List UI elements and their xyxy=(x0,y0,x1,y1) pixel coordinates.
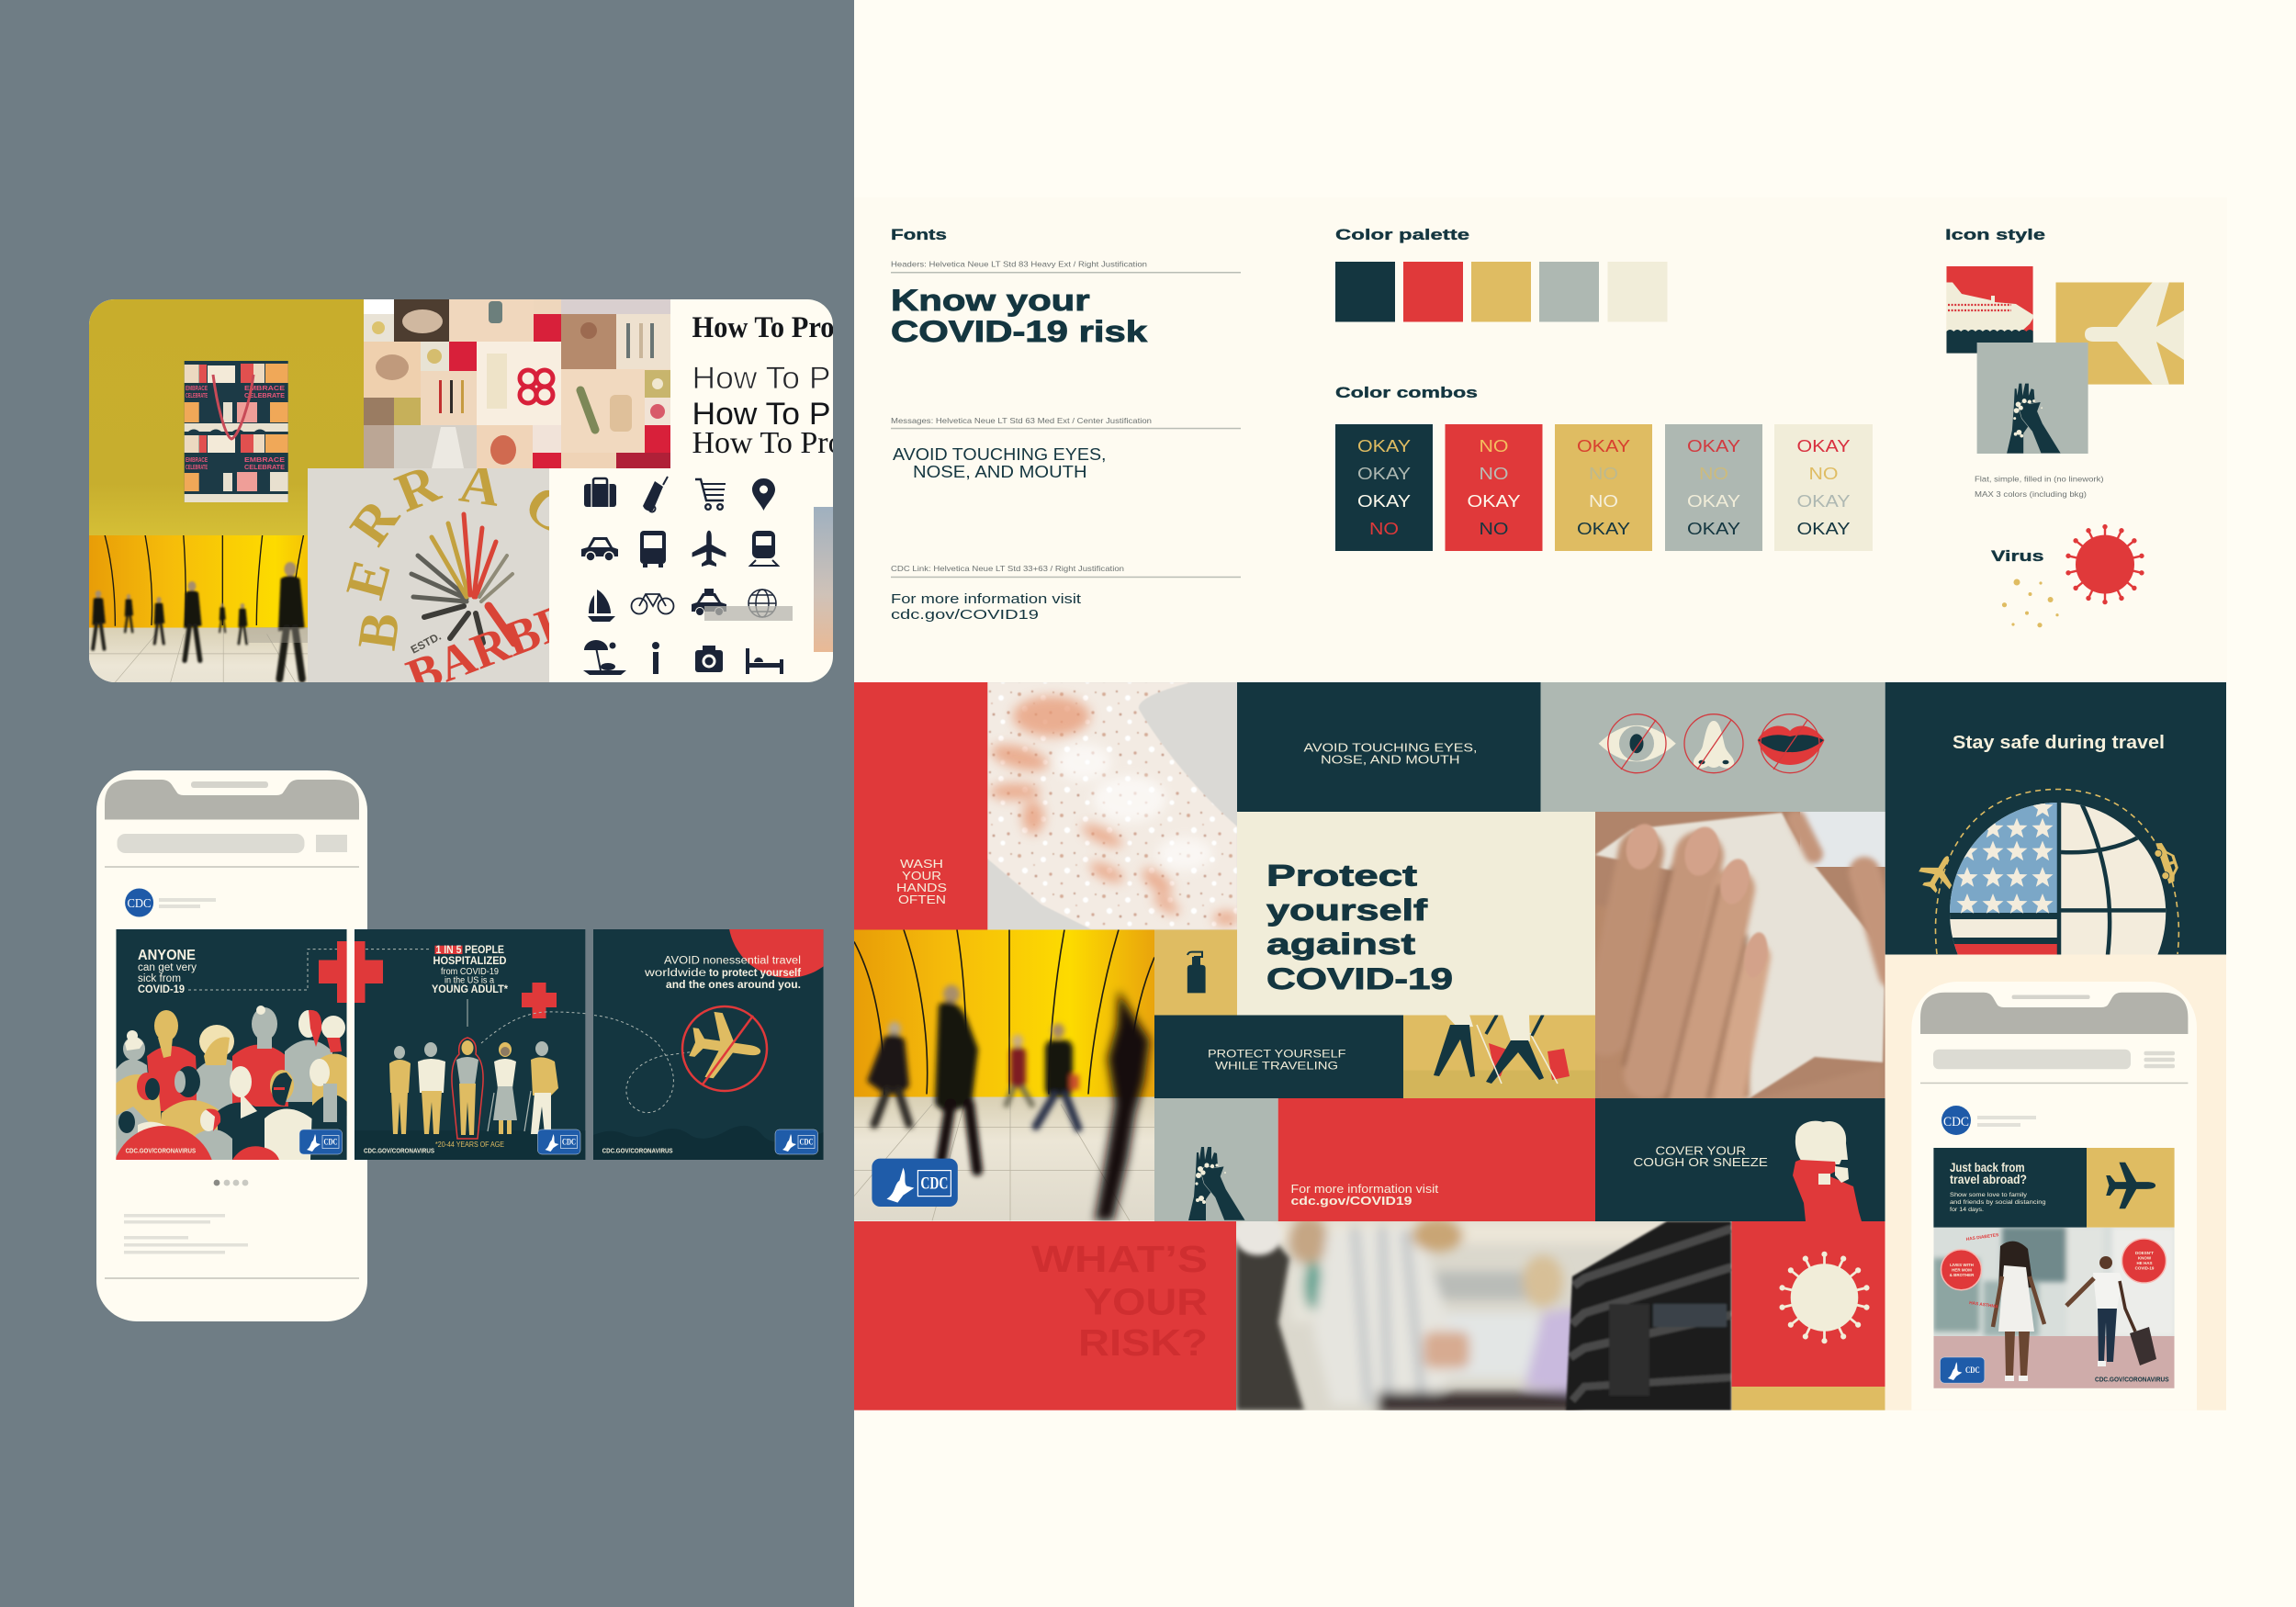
heading text: 1 IN 5 xyxy=(435,945,462,956)
section: fonts: cdc.gov/COVID19 xyxy=(891,607,1039,623)
icon: cruise ship xyxy=(1946,266,2033,354)
ad header: just back from travel abroad: Show some love to family xyxy=(1950,1192,2028,1198)
tile: protect yourself while traveling xyxy=(1154,1016,1403,1098)
callout: doesn't know he has covid: DOESN’T xyxy=(2135,1251,2154,1255)
ad photo: couple at airport: HAS ASTHMA xyxy=(1969,1300,1999,1309)
ad header: just back from travel abroad: travel abroad? xyxy=(1950,1173,2027,1186)
tile: what's your risk: RISK? xyxy=(1078,1321,1208,1364)
message text: and the ones around you. xyxy=(666,980,801,991)
social card 1: anyone can get sick xyxy=(116,929,347,1160)
icon: airplane xyxy=(2055,282,2184,385)
social card 2: 1 in 5 hospitalized xyxy=(355,929,586,1160)
callout: doesn't know he has covid: HE HAS xyxy=(2136,1261,2153,1265)
section: icon style: Flat, simple, filled in (no linework) xyxy=(1975,476,2104,483)
tile: wash your hands: WASH xyxy=(900,858,943,871)
photo: Berrac barber emblem: E xyxy=(334,554,402,605)
photo: tissue over face xyxy=(1595,812,1894,1111)
photo: yellow studio backdrop with shopping bag: EMBRACE xyxy=(244,457,285,464)
type specimens: How To Pro xyxy=(692,426,844,460)
illustration: person coughing into elbow xyxy=(1793,1121,1862,1221)
section: virus icon: Virus xyxy=(1991,548,2044,565)
type specimens: How To P xyxy=(692,361,830,396)
heading text: can get very xyxy=(138,962,197,973)
section: fonts: Fonts xyxy=(891,227,947,243)
section: colour combos: OKAY xyxy=(1357,465,1411,483)
ad photo: couple at airport xyxy=(1933,1227,2175,1388)
section: colour combos: OKAY xyxy=(1468,492,1521,511)
callout: doesn't know he has covid: COVID-19 xyxy=(2135,1265,2155,1271)
section: colour combos: NO xyxy=(1699,465,1728,483)
illustration: five figures xyxy=(389,1038,558,1139)
callout: lives with her mom and brother: HER MOM xyxy=(1952,1267,1972,1273)
CDC logo xyxy=(538,1129,580,1154)
photo: yellow studio backdrop with shopping bag: CELEBRATE xyxy=(244,465,285,471)
callout: doesn't know he has covid xyxy=(2122,1239,2166,1283)
section: fonts: Know your xyxy=(891,284,1090,317)
section: colour palette xyxy=(1335,227,1668,321)
tile: more information link xyxy=(1278,1098,1595,1221)
photo: yellow studio backdrop with shopping bag: EMBRACE xyxy=(186,457,208,464)
social card 3: avoid nonessential travel xyxy=(593,929,824,1160)
CDC logo: CDC xyxy=(1965,1365,1980,1376)
tile: walking travellers with suitcases xyxy=(1403,1015,1595,1098)
photo: Berrac barber emblem: BARBE xyxy=(400,592,579,704)
section: fonts xyxy=(891,227,1241,623)
section: fonts: For more information visit xyxy=(891,591,1082,607)
photo: Berrac barber emblem xyxy=(308,468,549,682)
photo: food packaging tile grid xyxy=(364,299,670,468)
social card 3: avoid nonessential travel: CDC.GOV/CORONAVIRUS xyxy=(602,1148,673,1155)
icon: mouth xyxy=(1758,714,1824,773)
CDC logo: CDC xyxy=(799,1139,814,1148)
icon: nose xyxy=(1684,714,1743,773)
tile: hand sanitiser bottle xyxy=(1154,929,1237,1016)
heading text: from COVID-19 xyxy=(441,967,499,977)
phone mockup: social feed xyxy=(96,770,367,1321)
section: fonts: NOSE, AND MOUTH xyxy=(913,463,1087,481)
photo: Berrac barber emblem: C xyxy=(514,472,581,545)
tile: what's your risk: YOUR xyxy=(1084,1281,1208,1323)
section: colour combos: OKAY xyxy=(1687,492,1740,511)
section: colour combos: OKAY xyxy=(1357,437,1411,455)
tile: wash your hands: OFTEN xyxy=(898,893,946,906)
tile: protect yourself while traveling: PROTECT YOURSELF xyxy=(1208,1047,1346,1060)
photo: Berrac barber emblem: R xyxy=(388,452,448,523)
heading text: in the US is a xyxy=(445,975,494,986)
illustration: flag globe xyxy=(1934,788,2180,955)
icon: no-fly plane xyxy=(682,1006,767,1091)
section: colour combos: Color combos xyxy=(1335,385,1478,401)
heading text: sick from xyxy=(138,973,181,984)
section: fonts: COVID-19 risk xyxy=(891,315,1147,348)
tile: what's your risk xyxy=(854,1221,1236,1410)
section: icon style: Icon style xyxy=(1945,227,2045,243)
heading text: YOUNG ADULT* xyxy=(432,984,508,995)
callout: lives with her mom and brother: & BROTHER xyxy=(1950,1273,1975,1277)
tile: cover your cough or sneeze xyxy=(1595,1098,1885,1221)
CDC logo: CDC xyxy=(562,1139,576,1148)
social card 1: anyone can get sick: CDC.GOV/CORONAVIRUS xyxy=(126,1148,196,1155)
tile: protect yourself against COVID-19: COVID-19 xyxy=(1266,962,1453,995)
CDC logo xyxy=(1940,1357,1985,1383)
heading text xyxy=(432,945,508,995)
tile: more information link: cdc.gov/COVID19 xyxy=(1291,1194,1412,1208)
type specimens: How To Pro xyxy=(692,311,834,344)
avatar: CDC circle: CDC xyxy=(1943,1115,1969,1129)
section: colour combos: OKAY xyxy=(1796,437,1850,455)
tile: avoid touching eyes, nose and mouth: AVOID TOUCHING EYES, xyxy=(1304,742,1477,755)
icon: washing hands xyxy=(1977,343,2088,454)
CDC logo: CDC xyxy=(323,1139,338,1148)
moodboard collage xyxy=(89,299,833,682)
section: fonts: CDC Link: Helvetica Neue LT Std 33+63 / Right Justification xyxy=(891,564,1124,573)
photo: Berrac barber emblem: ESTD. xyxy=(409,630,444,657)
social card 2: 1 in 5 hospitalized: *20-44 YEARS OF AGE xyxy=(435,1141,504,1149)
avatar: CDC circle xyxy=(1941,1106,1971,1135)
photo: yellow studio backdrop with shopping bag: EMBRACE xyxy=(244,386,285,392)
avatar: CDC circle xyxy=(125,889,153,916)
photo: Berrac barber emblem: A xyxy=(456,452,504,518)
photo: partially visible sunset xyxy=(814,507,833,652)
tile: protect yourself against COVID-19 xyxy=(1237,812,1595,1016)
ad photo: couple at airport: CDC.GOV/CORONAVIRUS xyxy=(2095,1377,2169,1383)
ad header: just back from travel abroad xyxy=(1933,1148,2175,1228)
tile: cream virus icon xyxy=(1732,1221,1885,1410)
tile: what's your risk: WHAT’S xyxy=(1031,1238,1208,1280)
avatar: CDC circle: CDC xyxy=(127,897,151,911)
photo: Berrac barber emblem: R xyxy=(338,488,411,556)
message text: AVOID nonessential travel xyxy=(664,955,801,966)
figure: woman xyxy=(1993,1242,2044,1381)
CDC logo xyxy=(775,1129,817,1154)
CDC logo xyxy=(872,1159,958,1207)
callout: doesn't know he has covid: KNOW xyxy=(2138,1256,2152,1260)
section: fonts: Headers: Helvetica Neue LT Std 83 Heavy Ext / Right Justification xyxy=(891,259,1147,268)
section: fonts: Messages: Helvetica Neue LT Std 63 Med Ext / Center Justification xyxy=(891,416,1152,425)
section: icon style: MAX 3 colors (including bkg) xyxy=(1975,490,2087,499)
section: icon style xyxy=(1945,227,2184,499)
section: fonts: AVOID TOUCHING EYES, xyxy=(893,445,1106,464)
illustration: crowd of people xyxy=(116,1006,347,1160)
section: colour combos: NO xyxy=(1369,520,1399,538)
icon: eye xyxy=(1599,714,1676,773)
section: colour combos: OKAY xyxy=(1796,492,1850,511)
callout: lives with her mom and brother: LIVES WITH xyxy=(1950,1263,1974,1267)
photo: airport luggage check xyxy=(1234,1215,1732,1412)
photo: yellow studio backdrop with shopping bag: EMBRACE xyxy=(186,386,208,392)
photo: subway commuters xyxy=(854,929,1154,1221)
section: colour combos: NO xyxy=(1479,437,1508,455)
photo: yellow studio backdrop with shopping bag: CELEBRATE xyxy=(186,393,208,399)
panel: style guide specification xyxy=(891,228,2184,628)
ad header: just back from travel abroad: for 14 days. xyxy=(1950,1207,1984,1213)
tile: protect yourself against COVID-19: Protect xyxy=(1266,860,1417,893)
type specimens xyxy=(692,318,833,454)
section: colour combos: NO xyxy=(1479,465,1508,483)
message text: worldwide xyxy=(644,968,706,979)
tile: wash your hands xyxy=(854,682,987,929)
CDC logo xyxy=(299,1129,342,1154)
photo: yellow studio backdrop with shopping bag: CELEBRATE xyxy=(186,465,208,471)
section: colour combos: NO xyxy=(1809,465,1839,483)
heading text: PEOPLE xyxy=(465,945,504,956)
icon grid: travel pictograms xyxy=(581,477,793,675)
tile: wash your hands: HANDS xyxy=(896,882,947,894)
photo: yellow studio backdrop with shopping bag: CELEBRATE xyxy=(244,393,285,399)
section: colour combos: NO xyxy=(1479,520,1508,538)
icon: gold car xyxy=(2155,843,2178,883)
campaign collage grid xyxy=(854,682,2226,1459)
section: colour combos: NO xyxy=(1589,465,1618,483)
section: virus icon xyxy=(1991,524,2144,627)
photo: Berrac barber emblem: B xyxy=(346,609,411,654)
photo: yellow studio backdrop with shopping bag xyxy=(89,299,364,535)
tile: avoid touching eyes, nose and mouth: NOSE, AND MOUTH xyxy=(1321,753,1460,766)
icon: gold plane xyxy=(1919,856,1953,893)
callout: lives with her mom and brother xyxy=(1941,1250,1982,1290)
section: colour combos: NO xyxy=(1589,492,1618,511)
tile: cover your cough or sneeze: COVER YOUR xyxy=(1655,1144,1746,1157)
tile: wash your hands: YOUR xyxy=(902,870,941,882)
tile: washing hands icon xyxy=(1154,1098,1278,1221)
tile: eye, nose, mouth prohibited icons xyxy=(1541,682,1885,812)
tile: cover your cough or sneeze: COUGH OR SNEEZE xyxy=(1633,1156,1768,1169)
tile: avoid touching eyes, nose and mouth xyxy=(1237,682,1541,812)
section: colour palette: Color palette xyxy=(1335,227,1469,243)
ad header: just back from travel abroad: Just back from xyxy=(1950,1161,2025,1174)
tile: stay safe during travel with globe xyxy=(1885,682,2226,955)
tile: protect yourself while traveling: WHILE TRAVELING xyxy=(1215,1060,1338,1073)
panel: phone ad mockup on cream xyxy=(1885,955,2226,1459)
section: colour combos: OKAY xyxy=(1687,437,1740,455)
social card 2: 1 in 5 hospitalized: CDC.GOV/CORONAVIRUS xyxy=(364,1148,434,1155)
section: colour combos xyxy=(1335,385,1873,551)
CDC logo: CDC xyxy=(920,1174,948,1194)
type specimens: How To P xyxy=(692,397,830,432)
photo: subway commuters xyxy=(89,535,308,682)
left slate grey panel xyxy=(0,0,854,1607)
section: colour combos: OKAY xyxy=(1577,437,1630,455)
message text: to protect yourself xyxy=(709,968,801,979)
section: colour combos: OKAY xyxy=(1687,520,1740,538)
message text xyxy=(644,955,801,991)
heading text: ANYONE xyxy=(138,948,196,963)
tile: more information link: For more information visit xyxy=(1291,1182,1439,1196)
section: colour combos: OKAY xyxy=(1796,520,1850,538)
ad photo: couple at airport: HAS DIABETES xyxy=(1965,1232,1999,1242)
tile: protect yourself against COVID-19: against xyxy=(1266,927,1415,961)
section: colour combos: OKAY xyxy=(1577,520,1630,538)
heading text xyxy=(138,948,197,995)
ad header: just back from travel abroad: and friends by social distancing xyxy=(1950,1199,2046,1206)
tile: protect yourself against COVID-19: yourself xyxy=(1266,893,1427,927)
heading text: COVID-19 xyxy=(138,984,185,995)
section: colour combos: OKAY xyxy=(1357,492,1411,511)
heading text: HOSPITALIZED xyxy=(433,956,507,967)
figure: man with suitcase xyxy=(2066,1256,2156,1366)
photo: soapy hand xyxy=(987,682,1239,930)
tile: stay safe during travel with globe: Stay safe during travel xyxy=(1953,733,2165,753)
